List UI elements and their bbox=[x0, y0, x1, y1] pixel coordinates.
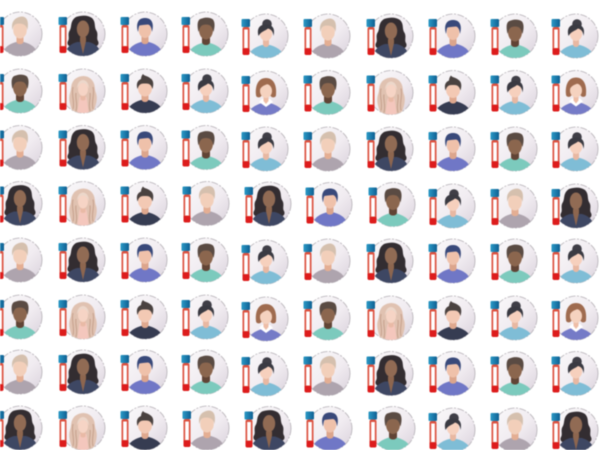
row 3 bbox=[0, 126, 598, 173]
icon: patient 1-2 bbox=[58, 12, 105, 58]
icon: patient 4-3 bbox=[120, 182, 167, 228]
icon: patient 7-5 bbox=[242, 352, 288, 398]
icon: patient 6-8 bbox=[428, 296, 475, 342]
row 1 bbox=[0, 12, 598, 60]
icon: patient 3-9 bbox=[490, 127, 537, 173]
icon: patient 5-8 bbox=[428, 239, 475, 285]
icon: patient 8-4 bbox=[182, 406, 229, 450]
icon: patient 5-3 bbox=[120, 238, 167, 284]
icon: patient 3-4 bbox=[182, 126, 228, 172]
icon: patient 5-7 bbox=[366, 239, 413, 285]
icon: patient 3-3 bbox=[120, 126, 167, 172]
icon: patient 1-8 bbox=[428, 14, 475, 60]
icon: patient 1-6 bbox=[304, 14, 350, 60]
row 4 bbox=[0, 182, 598, 230]
icon: patient 7-4 bbox=[182, 350, 228, 396]
icon: patient 6-6 bbox=[304, 296, 350, 342]
icon: patient 5-1 bbox=[0, 238, 42, 284]
icon: patient 3-5 bbox=[242, 127, 288, 173]
icon: patient 6-10 bbox=[552, 296, 598, 342]
icon: patient 8-9 bbox=[490, 408, 537, 450]
icon: patient 4-8 bbox=[428, 184, 475, 230]
icon: patient 2-5 bbox=[242, 71, 288, 117]
icon: patient 2-6 bbox=[304, 70, 350, 116]
icon: patient 2-3 bbox=[120, 69, 167, 115]
icon: patient 5-10 bbox=[552, 239, 598, 285]
icon: patient 7-3 bbox=[120, 350, 167, 396]
icon: patient 4-7 bbox=[368, 182, 415, 228]
icon: patient 8-3 bbox=[120, 406, 167, 450]
icon: patient 6-9 bbox=[490, 296, 537, 342]
icon: patient 6-4 bbox=[182, 295, 228, 341]
icon: patient 6-3 bbox=[120, 295, 167, 341]
icon: patient 2-1 bbox=[0, 69, 42, 115]
icon: patient 5-6 bbox=[304, 239, 350, 285]
icon: patient 4-6 bbox=[306, 182, 352, 228]
icon: patient 2-8 bbox=[428, 70, 475, 116]
icon: patient 5-4 bbox=[182, 238, 228, 284]
icon: patient 2-9 bbox=[490, 70, 537, 116]
icon: patient 1-9 bbox=[490, 14, 537, 60]
icon: patient 3-2 bbox=[58, 126, 105, 172]
icon: patient 8-2 bbox=[58, 406, 105, 450]
icon: patient 8-8 bbox=[428, 408, 475, 450]
icon: patient 4-10 bbox=[552, 184, 598, 230]
row 8 bbox=[0, 406, 598, 450]
icon: patient 8-1 bbox=[0, 406, 42, 450]
icon: patient 8-6 bbox=[306, 406, 352, 450]
icon: patient 4-1 bbox=[0, 182, 42, 228]
icon: patient 2-10 bbox=[552, 70, 598, 116]
icon: patient 3-6 bbox=[304, 127, 350, 173]
icon: patient 1-7 bbox=[366, 14, 413, 60]
icon: patient 4-5 bbox=[244, 182, 291, 228]
icon: patient 2-7 bbox=[366, 70, 413, 116]
icon: patient 7-10 bbox=[552, 352, 598, 398]
icon: patient 7-7 bbox=[366, 352, 413, 398]
icon: patient 4-2 bbox=[58, 182, 105, 228]
icon: patient 7-8 bbox=[428, 352, 475, 398]
icon: patient 1-1 bbox=[0, 12, 42, 58]
icon: patient 8-10 bbox=[552, 408, 598, 450]
icon: patient 6-2 bbox=[58, 295, 105, 341]
icon: patient 7-1 bbox=[0, 350, 42, 396]
icon: patient 8-7 bbox=[368, 406, 415, 450]
icon: patient 6-1 bbox=[0, 295, 42, 341]
icon: patient 3-7 bbox=[366, 127, 413, 173]
icon: patient 1-10 bbox=[552, 14, 598, 60]
icon: patient 5-9 bbox=[490, 239, 537, 285]
icon: patient 2-2 bbox=[58, 69, 105, 115]
icon: patient 6-5 bbox=[242, 297, 288, 343]
icon: patient 7-2 bbox=[58, 350, 105, 396]
icon: patient 3-10 bbox=[552, 127, 598, 173]
icon: patient 3-1 bbox=[0, 126, 42, 172]
icon: patient 5-2 bbox=[58, 238, 105, 284]
icon: patient 8-5 bbox=[244, 406, 291, 450]
icon: patient 6-7 bbox=[366, 296, 413, 342]
icon: patient 4-9 bbox=[490, 184, 537, 230]
icon: patient 5-5 bbox=[242, 240, 288, 286]
icon: patient 1-5 bbox=[242, 14, 288, 60]
icon: patient 7-9 bbox=[490, 352, 537, 398]
row 7 bbox=[0, 350, 598, 398]
icon: patient 1-4 bbox=[182, 12, 228, 58]
row 2 bbox=[0, 69, 598, 117]
row 6 bbox=[0, 295, 598, 343]
icon: patient 1-3 bbox=[120, 12, 167, 58]
icon: patient 2-4 bbox=[182, 69, 228, 115]
icon: patient 3-8 bbox=[428, 127, 475, 173]
icon: patient 7-6 bbox=[304, 352, 350, 398]
row 5 bbox=[0, 238, 598, 286]
icon: patient 4-4 bbox=[182, 182, 229, 228]
